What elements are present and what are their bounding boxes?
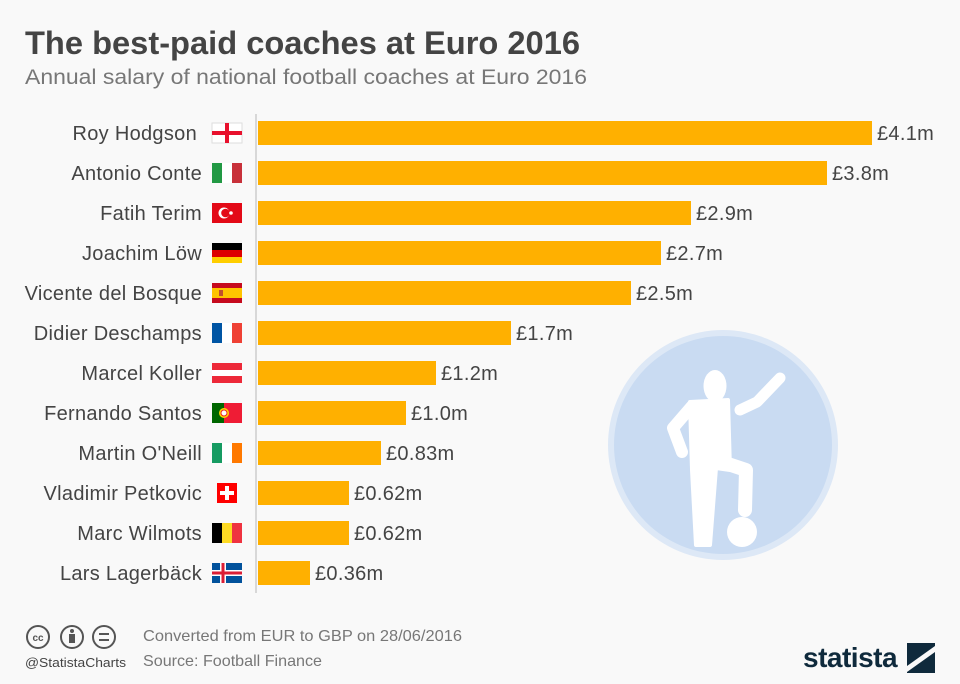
row: Joachim Löw: Joachim Löw — [82, 243, 202, 265]
row: Antonio Conte — [71, 161, 889, 185]
row: Antonio Conte: Antonio Conte — [71, 163, 202, 185]
row: Didier Deschamps: Didier Deschamps — [34, 323, 202, 345]
row: Martin O'Neill: £0.83m — [386, 443, 455, 465]
row: Vladimir Petkovic: Vladimir Petkovic — [44, 483, 202, 505]
row: Fatih Terim — [100, 201, 753, 225]
row: Didier Deschamps: £1.7m — [516, 323, 573, 345]
row: Fernando Santos — [44, 401, 468, 425]
icon: cc license — [27, 626, 115, 648]
row: Marc Wilmots: £0.62m — [354, 523, 423, 545]
icon: cc license: cc — [32, 633, 44, 644]
row: Vladimir Petkovic — [44, 481, 423, 505]
statista logo: statista — [803, 642, 898, 673]
row: Fernando Santos: Fernando Santos — [44, 403, 202, 425]
row: Roy Hodgson — [73, 121, 934, 145]
row: Joachim Löw: £2.7m — [666, 243, 723, 265]
row: Fatih Terim: £2.9m — [696, 203, 753, 225]
footer notes — [143, 628, 462, 670]
row: Lars Lagerbäck: £0.36m — [315, 563, 384, 585]
row: Marcel Koller: Marcel Koller — [81, 363, 202, 385]
handle: @StatistaCharts — [25, 655, 127, 670]
row: Marc Wilmots: Marc Wilmots — [77, 523, 202, 545]
axis line — [255, 114, 257, 593]
row: Antonio Conte: £3.8m — [832, 163, 889, 185]
icon: player in circle — [608, 330, 838, 560]
row: Roy Hodgson: £4.1m — [877, 123, 934, 145]
footer notes: Converted from EUR to GBP on 28/06/2016 — [143, 628, 462, 645]
row: Lars Lagerbäck: Lars Lagerbäck — [60, 563, 203, 585]
row: Martin O'Neill — [78, 441, 455, 465]
row: Joachim Löw — [82, 241, 723, 265]
row: Lars Lagerbäck — [60, 561, 384, 585]
row: Vicente del Bosque: Vicente del Bosque — [25, 283, 202, 305]
bar chart — [25, 121, 934, 585]
footer notes: Source: Football Finance — [143, 653, 322, 670]
row: Marcel Koller: £1.2m — [441, 363, 498, 385]
row: Marc Wilmots — [77, 521, 423, 545]
subtitle: Annual salary of national football coaches at Euro 2016 — [25, 66, 587, 89]
row: Roy Hodgson: Roy Hodgson — [73, 123, 197, 145]
row: Vicente del Bosque: £2.5m — [636, 283, 693, 305]
row: Vicente del Bosque — [25, 281, 693, 305]
row: Fatih Terim: Fatih Terim — [100, 203, 202, 225]
title: The best-paid coaches at Euro 2016 — [25, 25, 580, 61]
row: Didier Deschamps — [34, 321, 573, 345]
row: Fernando Santos: £1.0m — [411, 403, 468, 425]
row: Marcel Koller — [81, 361, 498, 385]
row: Martin O'Neill: Martin O'Neill — [78, 443, 202, 465]
row: Vladimir Petkovic: £0.62m — [354, 483, 423, 505]
